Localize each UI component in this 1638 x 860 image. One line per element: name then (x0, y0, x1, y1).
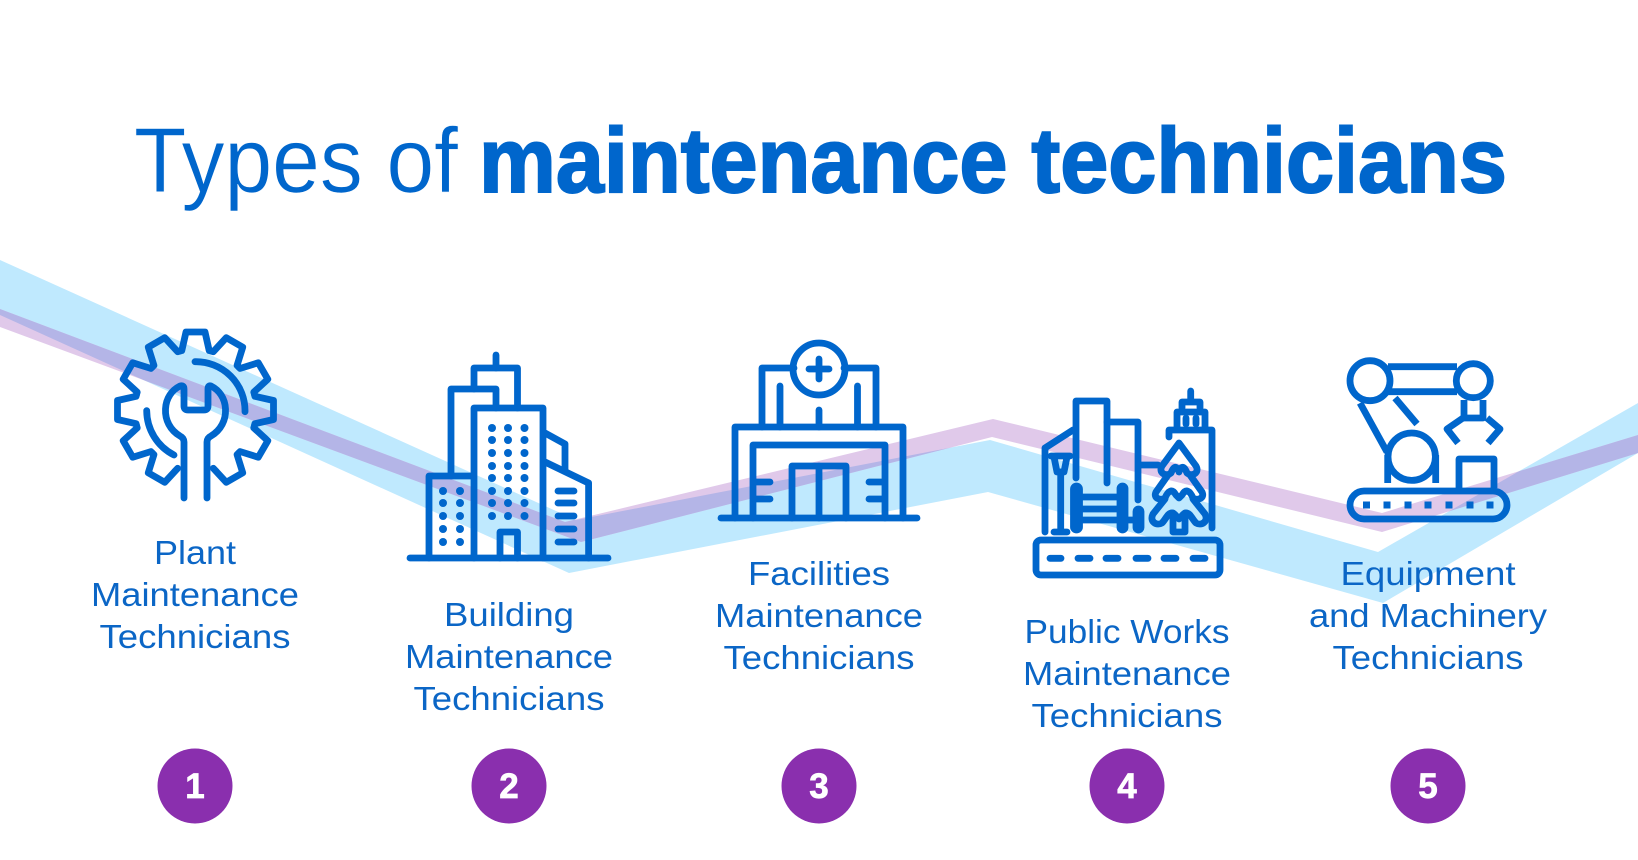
background ribbons (0, 260, 1638, 603)
purple ribbon (0, 309, 1638, 542)
label: plant maintenance technicians (91, 534, 299, 655)
label: plant maintenance technicians: Plant (154, 534, 236, 571)
label: building maintenance technicians: Maintenance (405, 638, 613, 675)
icon: city buildings (410, 355, 608, 558)
icon: hospital facility (721, 343, 917, 518)
title: maintenance technicians (479, 110, 1507, 212)
blue ribbon (0, 260, 1638, 603)
label: public works maintenance technicians: Public Works (1024, 613, 1230, 650)
label: building maintenance technicians: Building (444, 596, 574, 633)
label: public works maintenance technicians: Technicians (1032, 697, 1222, 734)
label: public works maintenance technicians: Maintenance (1023, 655, 1231, 692)
number badge 4 (1090, 748, 1164, 824)
label: facilities maintenance technicians (715, 555, 923, 676)
number badge 3: 3 (809, 767, 829, 806)
number badge 5: 5 (1418, 767, 1438, 806)
ribbon overlap (0, 309, 1638, 542)
label: plant maintenance technicians: Technicians (100, 618, 290, 655)
number badge 1: 1 (185, 767, 205, 806)
icon: public park and city (1036, 391, 1220, 575)
number badge 2: 2 (499, 767, 519, 806)
number badge 4: 4 (1117, 767, 1137, 806)
label: building maintenance technicians: Technicians (414, 680, 604, 717)
label: facilities maintenance technicians: Technicians (724, 639, 914, 676)
label: equipment and machinery technicians: Equipment (1340, 555, 1516, 592)
label: facilities maintenance technicians: Facilities (748, 555, 890, 592)
label: facilities maintenance technicians: Maintenance (715, 597, 923, 634)
icon: gear and wrench (118, 332, 274, 498)
label: public works maintenance technicians (1023, 613, 1231, 734)
label: plant maintenance technicians: Maintenance (91, 576, 299, 613)
label: building maintenance technicians (405, 596, 613, 717)
number badge 1 (158, 748, 232, 824)
label: equipment and machinery technicians: Technicians (1332, 639, 1524, 676)
label: equipment and machinery technicians: and Machinery (1309, 597, 1548, 634)
title: Types of (134, 110, 458, 212)
number badge 3 (782, 748, 856, 824)
label: equipment and machinery technicians (1309, 555, 1548, 676)
number badge 2 (472, 748, 546, 824)
number badge 5 (1390, 748, 1466, 824)
icon: robotic arm on conveyor (1350, 361, 1507, 519)
